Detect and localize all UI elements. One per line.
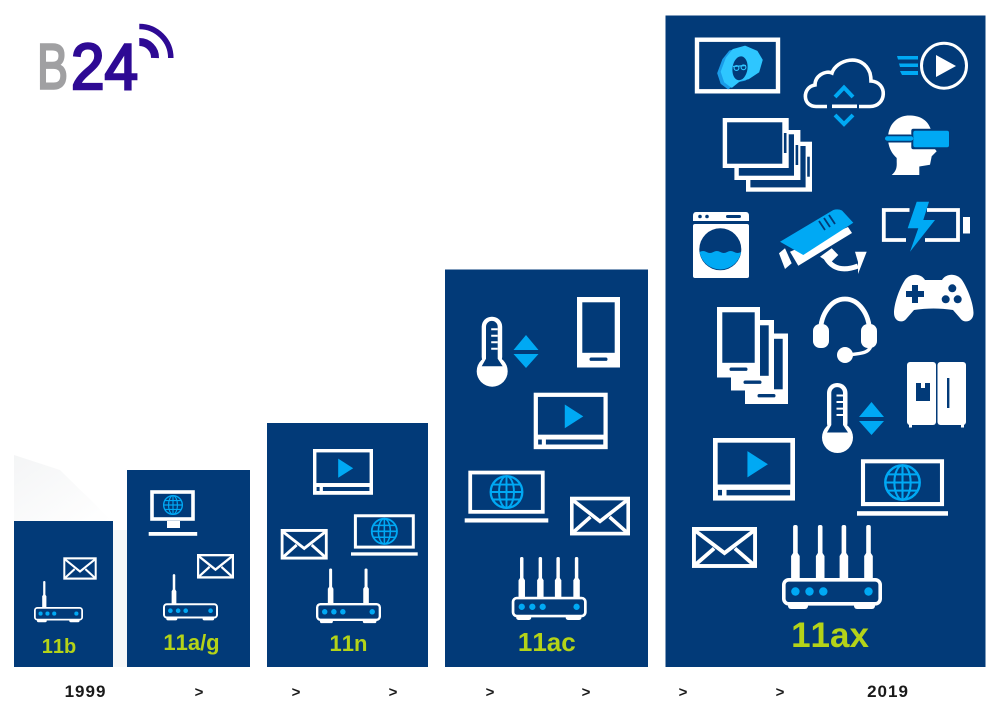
icon: battery charging (884, 202, 970, 252)
icon: video player 11ac (534, 393, 608, 449)
label: 11ac: 11ac (518, 627, 576, 657)
label: 11a/g: 11a/g (163, 630, 220, 655)
arrows: timeline chevrons: > (679, 684, 688, 701)
icon: game controller (894, 275, 974, 321)
panel: 11n (267, 423, 428, 667)
arrows: timeline chevrons (195, 684, 785, 701)
icon: washing machine (693, 212, 749, 278)
icon: envelope 11ax (694, 529, 755, 566)
icon: envelope 11b (64, 558, 96, 579)
icon: up down arrows 11ax (859, 402, 884, 435)
icon: VR headset head (884, 116, 951, 175)
arrows: timeline chevrons: > (389, 684, 398, 701)
label: 11ax: 11ax (791, 616, 869, 655)
icon: laptop 11ac (465, 473, 548, 523)
icon: stack of tablets (723, 118, 812, 192)
icon: refrigerator (907, 362, 966, 428)
icon: video player 11n (313, 449, 373, 495)
icon: router 11ax (784, 525, 880, 609)
icon: laptop 11ax (857, 461, 948, 516)
icon: fast play (897, 43, 966, 88)
arrows: timeline chevrons: > (486, 684, 495, 701)
icon: envelope 11n (282, 530, 326, 558)
icon: desktop monitor (149, 492, 197, 536)
year: 2019: 2019 (867, 682, 909, 701)
icon: stack of phones (717, 307, 788, 404)
icon: router 11b (35, 581, 82, 622)
arrows: timeline chevrons: > (195, 684, 204, 701)
icon: router 11a/g (164, 574, 217, 620)
icon: security camera (779, 209, 867, 274)
panel: 11a/g (127, 470, 250, 667)
background speckle (14, 455, 127, 667)
icon: router 11ac (513, 557, 585, 620)
icon: laptop 11n (351, 516, 418, 556)
icon: envelope 11a/g (198, 555, 233, 577)
logo: B24: B (37, 30, 68, 102)
panel: 11ax (666, 16, 986, 667)
icon: video player 11ax (713, 438, 795, 501)
arrows: timeline chevrons: > (292, 684, 301, 701)
year: 1999: 1999 (65, 682, 106, 701)
label: 11b: 11b (42, 636, 76, 658)
icon: router 11n (317, 569, 380, 623)
arrows: timeline chevrons: > (776, 684, 785, 701)
icon: thermometer 11ac (477, 317, 508, 387)
logo: B24 (37, 26, 171, 103)
icon: screen with face (697, 40, 778, 91)
icon: phone 11ac (577, 297, 620, 368)
label: 11n: 11n (330, 631, 367, 656)
icon: cloud with up and down arrows (805, 60, 883, 124)
icon: up down arrows 11ac (514, 335, 538, 368)
panel: 11ac (445, 270, 648, 667)
icon: envelope 11ac (572, 499, 628, 534)
arrows: timeline chevrons: > (582, 684, 591, 701)
icon: thermometer 11ax (822, 383, 853, 453)
timeline (65, 682, 909, 701)
logo: B24: 24 (71, 30, 138, 103)
panel: 11b (14, 521, 113, 667)
icon: headset (813, 299, 877, 363)
